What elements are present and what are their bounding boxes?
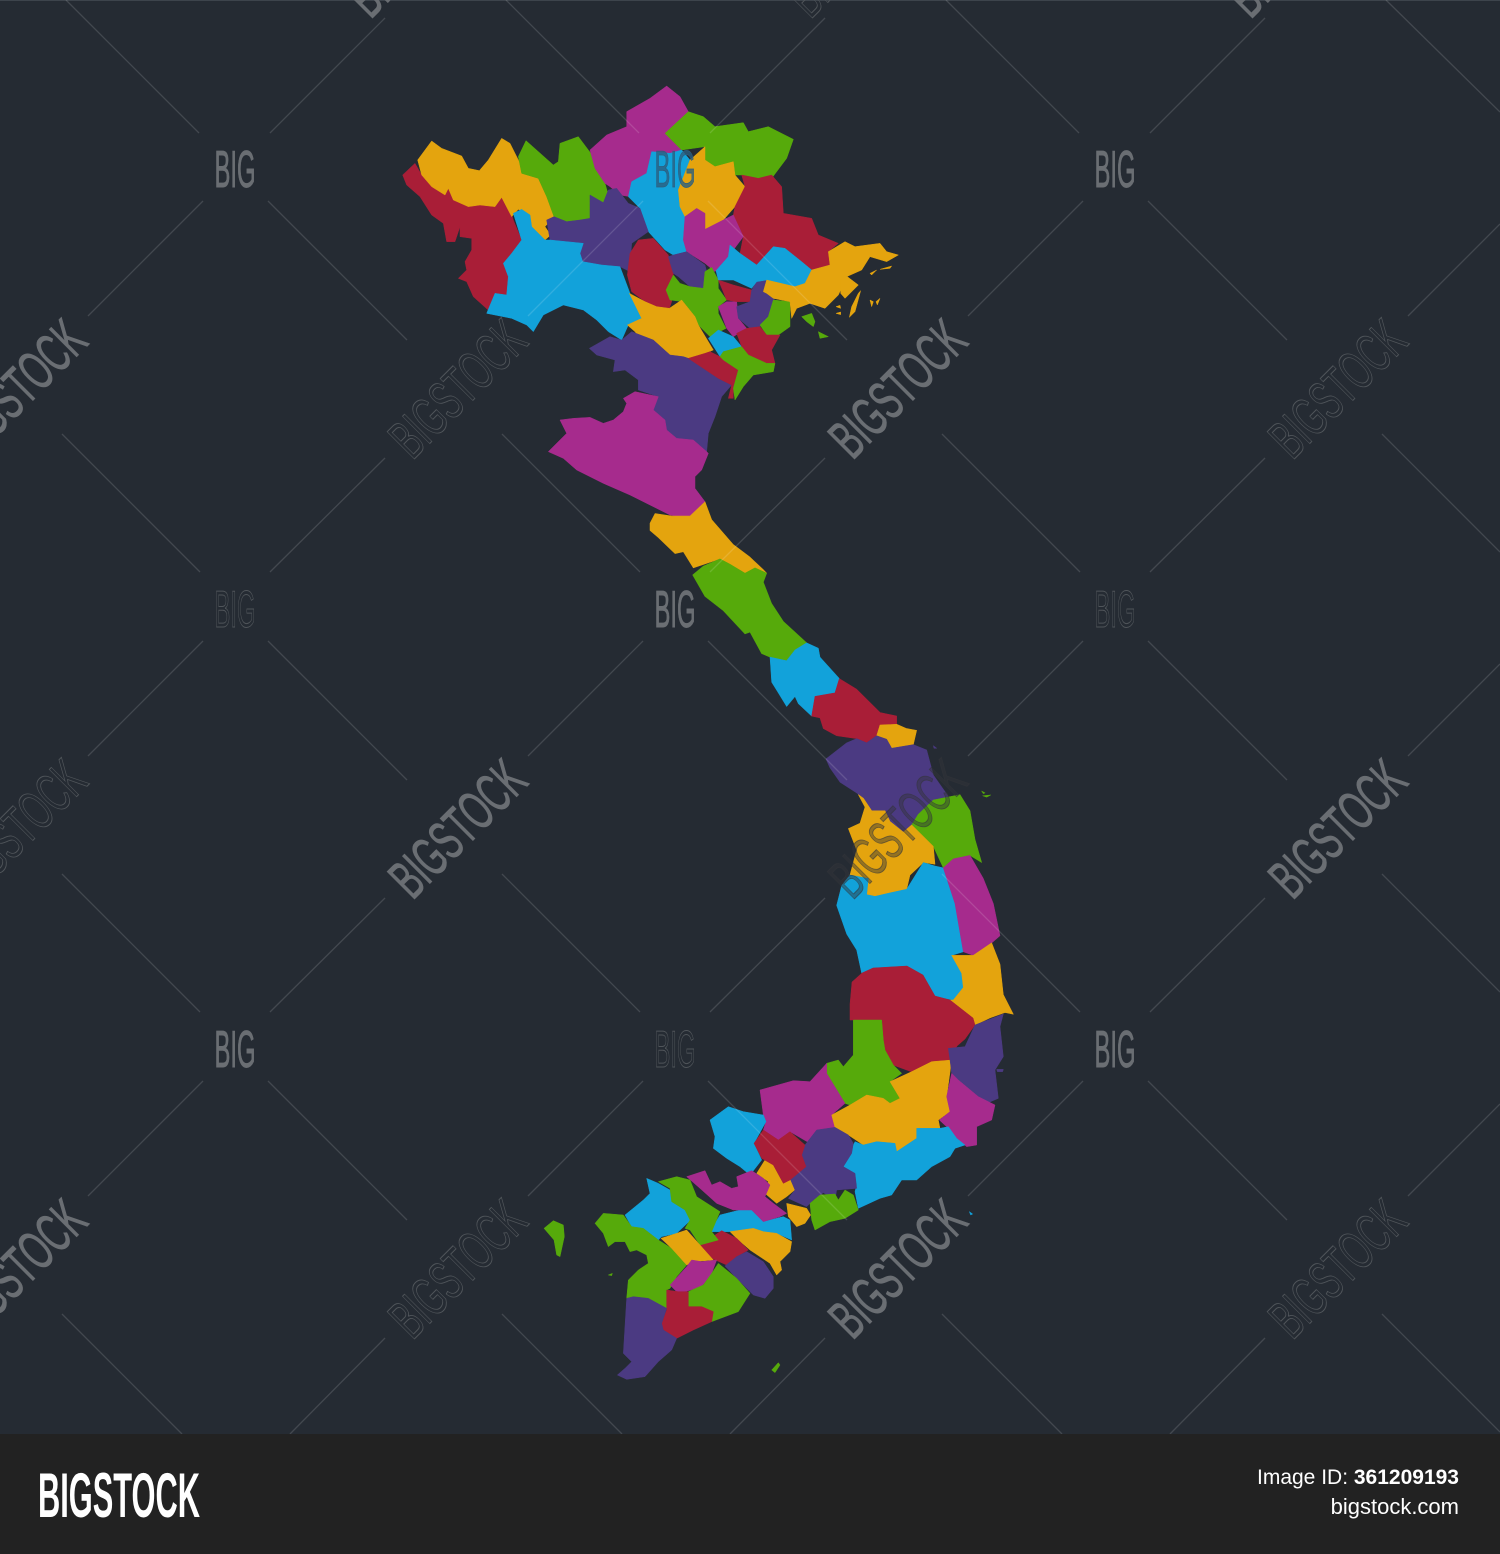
watermark: BIGSTOCK labels: BIGSTOCK — [1256, 1187, 1418, 1349]
footer bar — [0, 1434, 1500, 1554]
watermark: BIG labels: BIG — [654, 141, 696, 199]
watermark: BIGSTOCK labels: BIGSTOCK — [816, 747, 978, 909]
site url: bigstock.com — [1331, 1494, 1459, 1519]
image id: Image ID: 361209193 — [1257, 1466, 1459, 1489]
watermark: BIGSTOCK labels: BIGSTOCK — [376, 747, 538, 909]
watermark: BIG labels: BIG — [214, 581, 256, 639]
top edge line — [0, 0, 1500, 1]
watermark: BIGSTOCK labels: BIGSTOCK — [816, 1187, 978, 1349]
Dak Lak province — [850, 966, 975, 1072]
text: BIG — [1094, 1021, 1136, 1079]
southern provinces — [544, 1014, 1003, 1379]
northern provinces — [403, 86, 898, 518]
watermark: BIGSTOCK labels: BIGSTOCK — [816, 307, 978, 469]
watermark: BIG labels: BIG — [214, 1021, 256, 1079]
map of Vietnam — [403, 86, 1013, 1379]
footer bar: BIGSTOCK — [38, 1461, 200, 1531]
text: BIG — [1094, 141, 1136, 199]
watermark: BIG labels: BIG — [654, 581, 696, 639]
watermark: BIGSTOCK labels: BIGSTOCK — [376, 1187, 538, 1349]
watermark: BIG labels: BIG — [654, 1021, 696, 1079]
text: BIG — [1094, 581, 1136, 639]
watermark: BIGSTOCK labels: BIGSTOCK — [376, 307, 538, 469]
watermark: BIGSTOCK labels: BIGSTOCK — [1256, 747, 1418, 909]
watermark: BIGSTOCK labels: BIGSTOCK — [1256, 307, 1418, 469]
watermark: BIG labels — [214, 141, 1136, 1079]
watermark: BIG labels: BIG — [214, 141, 256, 199]
central provinces — [650, 502, 1013, 1025]
